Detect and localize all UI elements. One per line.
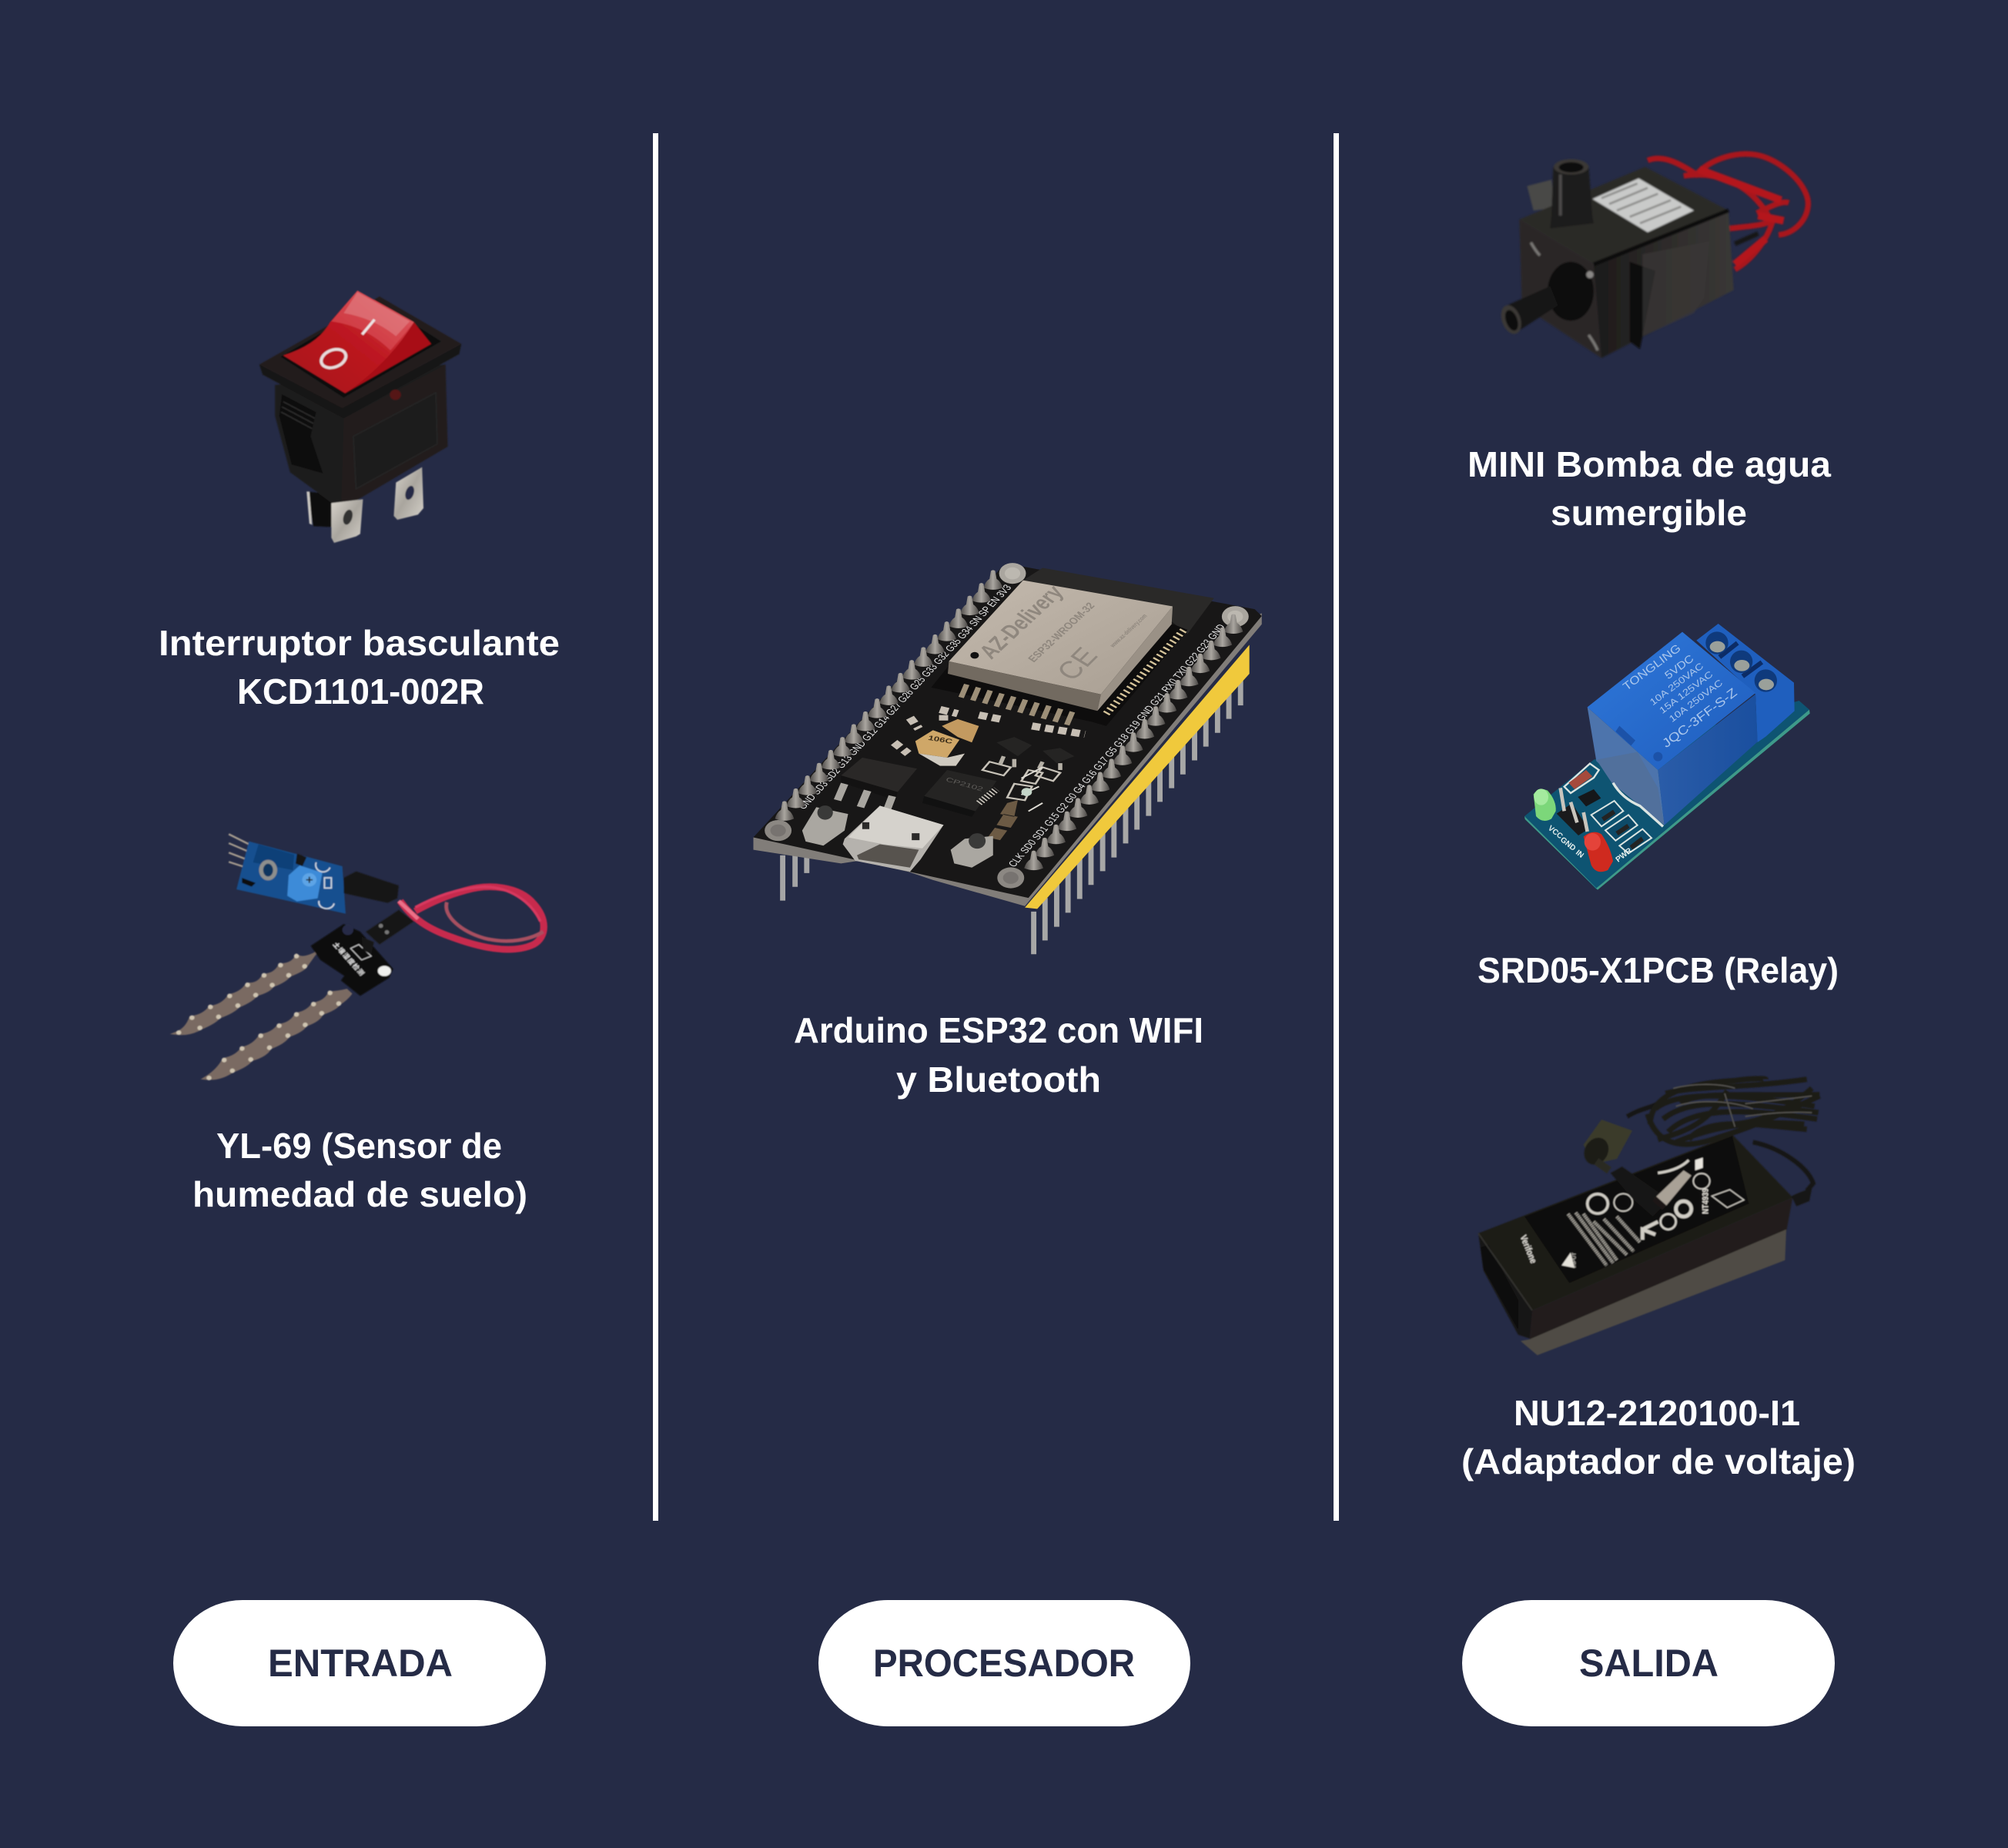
icon: soil moisture sensor: 土壤湿度检测	[332, 941, 366, 977]
icon: relay module: 15A 125VAC	[1657, 668, 1715, 716]
icon: relay module: 10A 250VAC	[1667, 677, 1725, 725]
icon: relay module	[1524, 624, 1810, 890]
icon: relay module: PWR	[1615, 846, 1634, 864]
icon: relay module: TONGLING	[1621, 642, 1683, 694]
label: interruptor	[159, 623, 560, 711]
label: interruptor: KCD1101-002R	[237, 671, 484, 711]
label: yl-69: humedad de suelo)	[192, 1174, 527, 1214]
label: adaptador: NU12-2120100-I1	[1514, 1393, 1800, 1433]
pill: entrada	[173, 1600, 546, 1726]
icon: power adapter	[1478, 1079, 1819, 1355]
panel: procesador	[753, 563, 1262, 1726]
icon: relay module: IN	[1574, 849, 1585, 860]
label: adaptador	[1461, 1393, 1856, 1481]
icon: power adapter: Verifone	[1518, 1234, 1539, 1265]
icon: rocker switch	[259, 290, 461, 543]
icon: esp32 board: CP2102	[945, 776, 984, 792]
icon: power adapter: NT4939	[1701, 1188, 1710, 1214]
label: yl-69: YL-69 (Sensor de	[216, 1126, 502, 1166]
label: relay: SRD05-X1PCB (Relay)	[1478, 950, 1839, 990]
pill: salida: SALIDA	[1579, 1642, 1719, 1685]
icon: esp32 board: 106C	[927, 735, 953, 745]
label: esp32: y Bluetooth	[896, 1060, 1101, 1100]
label: interruptor: Interruptor basculante	[159, 623, 560, 663]
pill: procesador	[818, 1600, 1190, 1726]
label: bomba: MINI Bomba de agua	[1468, 444, 1831, 484]
column divider: right	[1334, 133, 1339, 1521]
icon: relay module: VCC	[1546, 824, 1565, 841]
icon: esp32 board	[753, 563, 1262, 954]
icon: soil moisture sensor	[177, 834, 544, 1078]
icon: relay module: GND	[1558, 835, 1577, 853]
icon: esp32 board: ESP32-WROOM-32	[1025, 600, 1097, 664]
label: yl-69	[192, 1126, 527, 1214]
icon: esp32 board: CE	[1049, 642, 1104, 685]
panel: entrada	[159, 290, 560, 1726]
icon: esp32 board: CLK SD0 SD1 G15 G2 G0 G4 G16 G17 G5 G18 G19 GND G21 RX0 TX0 G22 G23 GND	[1006, 622, 1227, 869]
pill: entrada: ENTRADA	[268, 1642, 453, 1685]
icon: water pump	[1498, 154, 1808, 358]
label: esp32	[794, 1010, 1203, 1100]
label: bomba	[1468, 444, 1831, 533]
icon: relay module: 5VDC	[1662, 652, 1696, 681]
panel: salida	[1461, 154, 1856, 1726]
icon: esp32 board: www.az-delivery.com	[1108, 613, 1149, 649]
label: adaptador: (Adaptador de voltaje)	[1461, 1441, 1856, 1481]
pill: salida	[1462, 1600, 1835, 1726]
pill: procesador: PROCESADOR	[873, 1642, 1135, 1685]
icon: esp32 board: AZ-Delivery	[974, 581, 1069, 663]
label: esp32: Arduino ESP32 con WIFI	[794, 1010, 1203, 1050]
icon: relay module: JQC-3FF-S-Z	[1660, 686, 1740, 751]
label: bomba: sumergible	[1551, 493, 1747, 533]
column divider: left	[653, 133, 658, 1521]
icon: relay module: 10A 250VAC	[1648, 660, 1705, 708]
icon: esp32 board: GND SD3 SD2 G13 GND G12 G14 G27 G26 G25 G33 G32 G35 G34 SN SP EN 3V3	[795, 583, 1014, 811]
icon: power adapter: INPUT	[1572, 1253, 1578, 1268]
